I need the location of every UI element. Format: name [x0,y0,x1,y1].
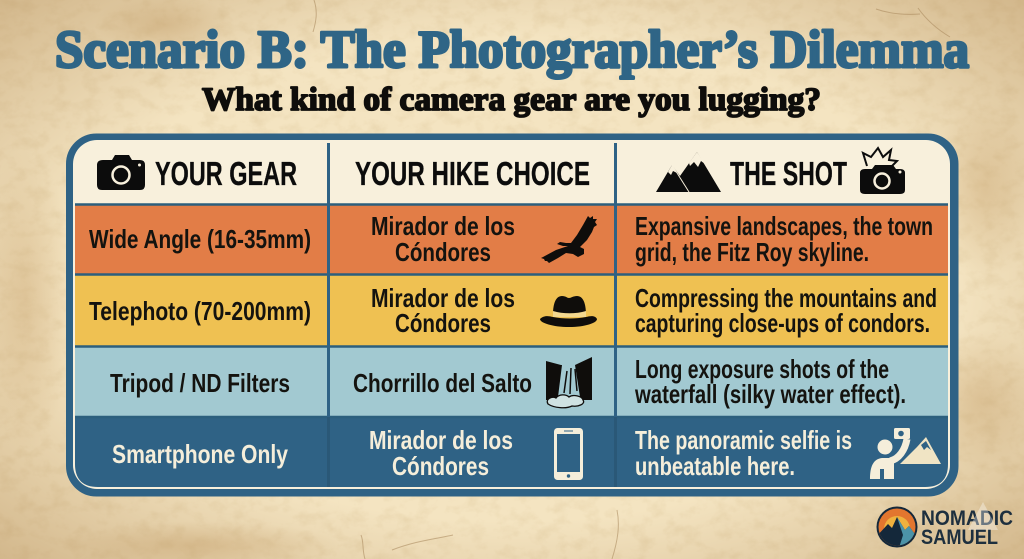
header: the shot [656,148,905,194]
hike choice: Cóndores [395,237,491,267]
icon: selfie with mountains [870,428,941,479]
heading: the shot: THE SHOT [730,155,847,192]
table inner cream outline [73,140,950,489]
logo wordmark: SAMUEL [921,526,998,549]
logo badge [876,506,919,548]
person [870,428,910,479]
subtitle: What kind of camera gear are you lugging? [202,82,821,118]
row: telephoto [89,283,937,338]
icon: phone [554,428,583,480]
icon: camera [97,155,145,190]
row: wide angle [89,211,933,267]
shot description: unbeatable here. [635,451,795,481]
mountain [900,437,941,464]
hike choice: Cóndores [395,308,491,338]
hike choice: Mirador de los [369,425,513,455]
row: tripod [110,354,906,409]
shot description: Long exposure shots of the [635,354,889,384]
title: Scenario B: The Photographer’s Dilemma [55,21,969,79]
icon: mountains [656,152,721,192]
header: your gear [97,155,297,192]
hike choice: Chorrillo del Salto [353,368,532,398]
shot description: waterfall (silky water effect). [634,379,906,409]
table frame [70,137,955,493]
heading: your hike choice: YOUR HIKE CHOICE [355,155,590,192]
logo wordmark: NOMADIC [921,507,1013,530]
comparison table [70,137,955,493]
faint watermark [968,502,998,530]
icon: camera with flash [860,148,905,194]
table cells [75,143,948,487]
hike choice: Cóndores [392,451,489,481]
shot description: The panoramic selfie is [635,425,852,455]
gear label: Tripod / ND Filters [110,368,290,398]
shot description: grid, the Fitz Roy skyline. [635,237,869,267]
hike choice: Mirador de los [371,283,515,313]
icon: condor [541,216,597,263]
icon: waterfall [546,357,592,408]
hike choice: Mirador de los [371,211,515,241]
heading: your gear: YOUR GEAR [155,155,297,192]
row: smartphone [112,425,941,481]
shot description: capturing close-ups of condors. [635,308,930,338]
gear label: Wide Angle (16-35mm) [89,224,311,254]
gear label: Smartphone Only [112,439,288,469]
gear label: Telephoto (70-200mm) [89,296,311,326]
icon: hat [540,296,597,327]
logo: nomadic samuel [876,502,1013,549]
shot description: Expansive landscapes, the town [635,211,933,241]
